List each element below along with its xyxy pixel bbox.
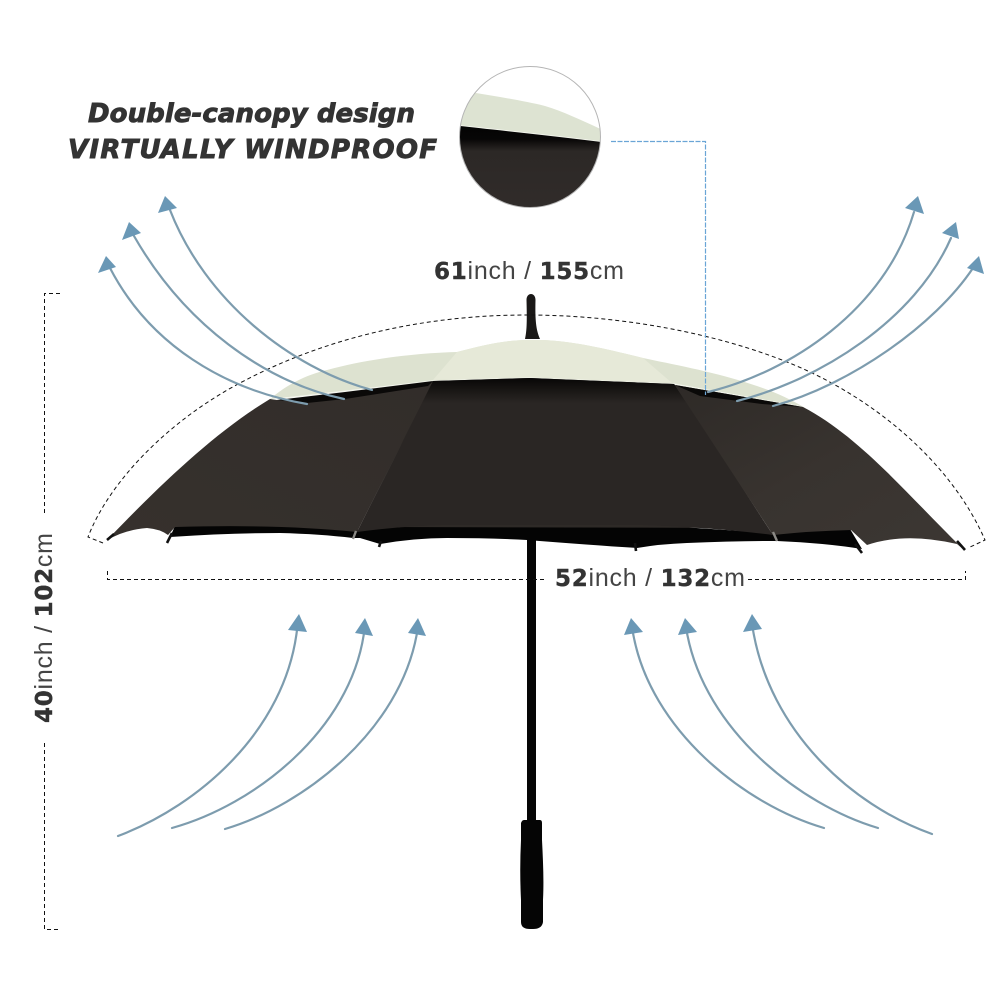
height dimension (30, 294, 60, 930)
heading (68, 99, 437, 165)
wind arrows: upper right (708, 196, 984, 406)
rib tips (107, 533, 965, 553)
lower canopy: centre panel (357, 378, 773, 535)
rib joints (353, 531, 777, 541)
canopy arc label: 61inch / 155cm (434, 257, 624, 285)
upper canopy (270, 340, 805, 408)
wind arrows: lower right (624, 614, 932, 834)
lower canopy: base under panels (365, 378, 768, 528)
lower canopy: left panel (107, 382, 433, 540)
canopy arc dimension (88, 257, 985, 548)
heading line 1: Double-canopy design (88, 99, 415, 129)
heading line 2: VIRTUALLY WINDPROOF (68, 135, 437, 165)
wind arrows: upper left (98, 196, 372, 404)
umbrella (107, 294, 965, 929)
black gap wedges (277, 381, 433, 403)
width label: 52inch / 132cm (555, 564, 745, 592)
wind arrows: lower left (118, 614, 426, 836)
detail circle: double canopy close-up (459, 66, 601, 208)
leader line from circle to canopy (611, 142, 706, 395)
lower canopy: right panel (675, 385, 963, 549)
height label: 40inch / 102cm (30, 533, 58, 723)
lower canopy: under shadow (170, 524, 862, 549)
grip (520, 820, 543, 929)
width dimension (108, 564, 966, 592)
ferrule (525, 294, 540, 339)
shaft (527, 530, 536, 825)
